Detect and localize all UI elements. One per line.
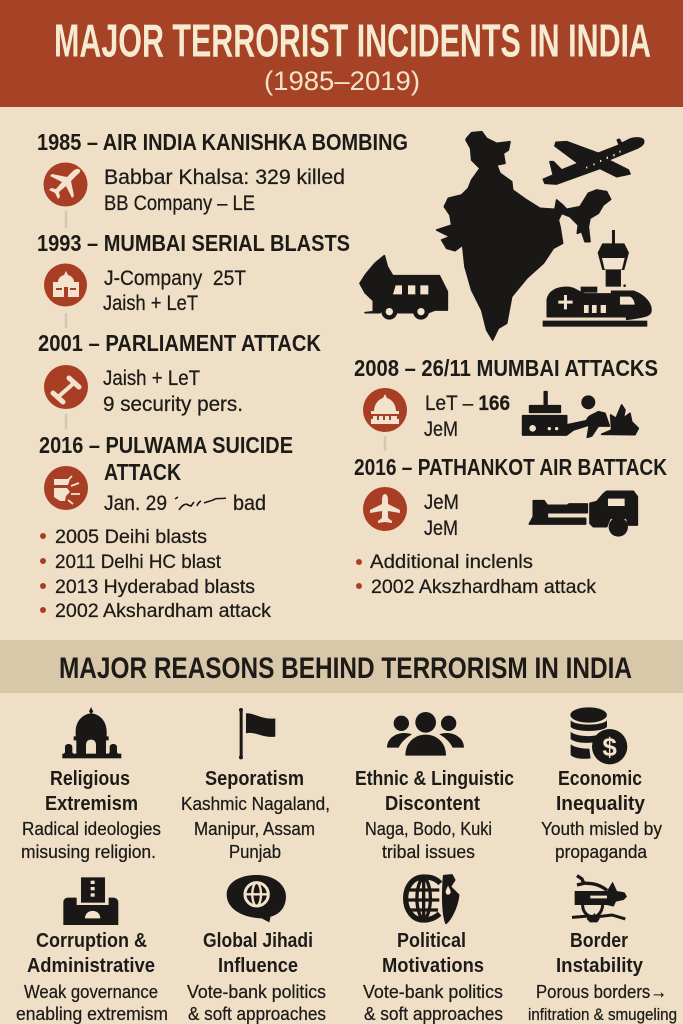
- reason: ethnic and linguistic discontent: Naga, Bodo, Kuki: [365, 818, 492, 839]
- reason: global jihadi influence: Influence: [218, 955, 298, 977]
- incident: 2008 26/11 Mumbai attacks: LeT – 166: [425, 392, 510, 415]
- incident: 2001 Parliament attack: [38, 330, 321, 416]
- icon: domed building badge: [44, 264, 87, 306]
- icon: coin stack with dollar: [570, 707, 627, 764]
- reason: ethnic and linguistic discontent: tribal issues: [382, 841, 475, 862]
- icon: plane badge: [44, 162, 88, 206]
- map of India with transport icons: [360, 132, 651, 340]
- icon: airliner: [543, 138, 644, 184]
- reason: global jihadi influence: Vote-bank politics: [187, 981, 326, 1002]
- incident: 2008 26/11 Mumbai attacks: [354, 355, 658, 441]
- reason: political motivations: Vote-bank politics: [363, 981, 503, 1002]
- list: other incidents, left: 2005 Deihi blasts: [55, 526, 207, 548]
- reason: separatism: [181, 708, 330, 862]
- icon: ballot box: [63, 877, 118, 925]
- incident: 2016 Pulwama suicide attack: 2016 – PULWAMA SUICIDE: [39, 432, 293, 458]
- reason: border instability: Instability: [556, 955, 644, 977]
- icon: hammer badge: [44, 365, 88, 409]
- icon: truck with flatbed: [529, 491, 637, 537]
- incident: 2001 Parliament attack: Jaish + LeT: [103, 367, 200, 390]
- reason: border instability: [528, 876, 677, 1024]
- section heading band: [0, 640, 683, 693]
- reason: religious extremism: [21, 707, 161, 862]
- reason: economic inequality: Youth misled by: [541, 818, 663, 839]
- incident: 1993 Mumbai serial blasts: [37, 230, 350, 315]
- reason: global jihadi influence: Global Jihadi: [203, 930, 313, 952]
- reason: political motivations: [363, 875, 503, 1024]
- reason: ethnic and linguistic discontent: Discontent: [385, 793, 480, 815]
- reason: corruption and administrative: enabling extremism: [16, 1003, 168, 1024]
- list: other incidents, left: 2002 Akshardham attack: [55, 600, 271, 622]
- reason: separatism: Punjab: [229, 841, 281, 862]
- reason: economic inequality: propaganda: [555, 841, 648, 862]
- incident: 2016 Pathankot air attack: JeM: [424, 491, 459, 514]
- incident: 1993 Mumbai serial blasts: J-Company 25T: [104, 267, 246, 290]
- incident: 2016 Pulwama suicide attack: ATTACK: [104, 459, 181, 485]
- reason: border instability: Border: [570, 930, 628, 952]
- icon: group of people: [387, 712, 464, 756]
- icon: coin stack with dollar: $: [602, 732, 617, 762]
- reason: separatism: Seporatism: [205, 768, 304, 790]
- reason: corruption and administrative: [16, 877, 168, 1024]
- reason: economic inequality: Inequality: [556, 793, 646, 815]
- reason: religious extremism: misusing religion.: [21, 841, 156, 862]
- incident: 2016 Pulwama suicide attack: Jan. 29: [104, 492, 167, 515]
- icon: border crossing with barbed wire: [572, 876, 627, 922]
- icon: domed monument: [62, 707, 121, 758]
- icon: control tower and train: [543, 230, 651, 327]
- incident: 1985 Air India Kanishka bombing: [37, 129, 408, 215]
- reason: border instability: Porous borders→: [536, 981, 667, 1002]
- reason: global jihadi influence: & soft approaches: [188, 1003, 326, 1024]
- incident: 1993 Mumbai serial blasts: 1993 – MUMBAI SERIAL BLASTS: [37, 230, 350, 256]
- reason: separatism: Manipur, Assam: [194, 818, 315, 839]
- incident: 1985 Air India Kanishka bombing: Babbar Khalsa: 329 killed: [104, 166, 345, 189]
- reason: corruption and administrative: Administrative: [27, 955, 155, 977]
- reason: religious extremism: Religious: [50, 768, 130, 790]
- subtitle: date range: (1985–2019): [264, 66, 420, 96]
- reason: religious extremism: Radical ideologies: [22, 818, 161, 839]
- reason: political motivations: & soft approaches: [364, 1003, 503, 1024]
- incident: 2016 Pathankot air attack: [354, 454, 667, 540]
- icon: speech bubble with globe: [227, 875, 286, 922]
- icon: explosion badge: [44, 466, 88, 510]
- incident: 1985 Air India Kanishka bombing: 1985 – AIR INDIA KANISHKA BOMBING: [37, 129, 408, 155]
- reason: economic inequality: [541, 707, 663, 862]
- reason: corruption and administrative: Weak governance: [24, 981, 158, 1002]
- incident: 1993 Mumbai serial blasts: Jaish + LeT: [103, 292, 198, 315]
- reason: political motivations: Political: [397, 930, 466, 952]
- list: other incidents, left: 2011 Delhi HC blast: [55, 551, 222, 573]
- reason: religious extremism: Extremism: [45, 793, 138, 815]
- reason: political motivations: Motivations: [382, 955, 484, 977]
- reason: ethnic and linguistic discontent: [355, 712, 514, 862]
- icon: India map: [437, 132, 611, 340]
- incident: 2001 Parliament attack: 9 security pers.: [103, 393, 243, 416]
- incident: 2016 Pulwama suicide attack: [39, 432, 293, 515]
- incident: 2008 26/11 Mumbai attacks: JeM: [424, 418, 458, 441]
- incident: 2001 Parliament attack: 2001 – PARLIAMENT ATTACK: [38, 330, 321, 356]
- icon: globe and shield: [405, 875, 459, 923]
- icon: plane badge: [363, 487, 407, 531]
- list: additional incidents, right: Additional inclenls: [370, 551, 533, 573]
- reason: global jihadi influence: [187, 875, 326, 1024]
- reason: separatism: Kashmic Nagaland,: [181, 793, 330, 814]
- list: other incidents, left: [40, 526, 271, 622]
- header banner: [0, 0, 683, 107]
- icon: boat, figure and flames: [523, 392, 638, 437]
- icon: Taj dome badge: [363, 388, 407, 432]
- list: additional incidents, right: 2002 Akszhardham attack: [371, 576, 596, 598]
- icon: van and tree: [360, 256, 447, 320]
- incident: 1985 Air India Kanishka bombing: BB Company – LE: [104, 192, 255, 215]
- list: other incidents, left: 2013 Hyderabad blasts: [55, 576, 255, 598]
- incident: 2016 Pathankot air attack: JeM: [424, 517, 458, 540]
- icon: flag: [239, 708, 275, 759]
- reason: economic inequality: Economic: [558, 768, 642, 790]
- incident: 2016 Pulwama suicide attack: bad: [233, 492, 266, 515]
- list: additional incidents, right: [356, 551, 596, 598]
- reason: corruption and administrative: Corruption &: [36, 930, 147, 952]
- reason: ethnic and linguistic discontent: Ethnic & Linguistic: [355, 768, 514, 790]
